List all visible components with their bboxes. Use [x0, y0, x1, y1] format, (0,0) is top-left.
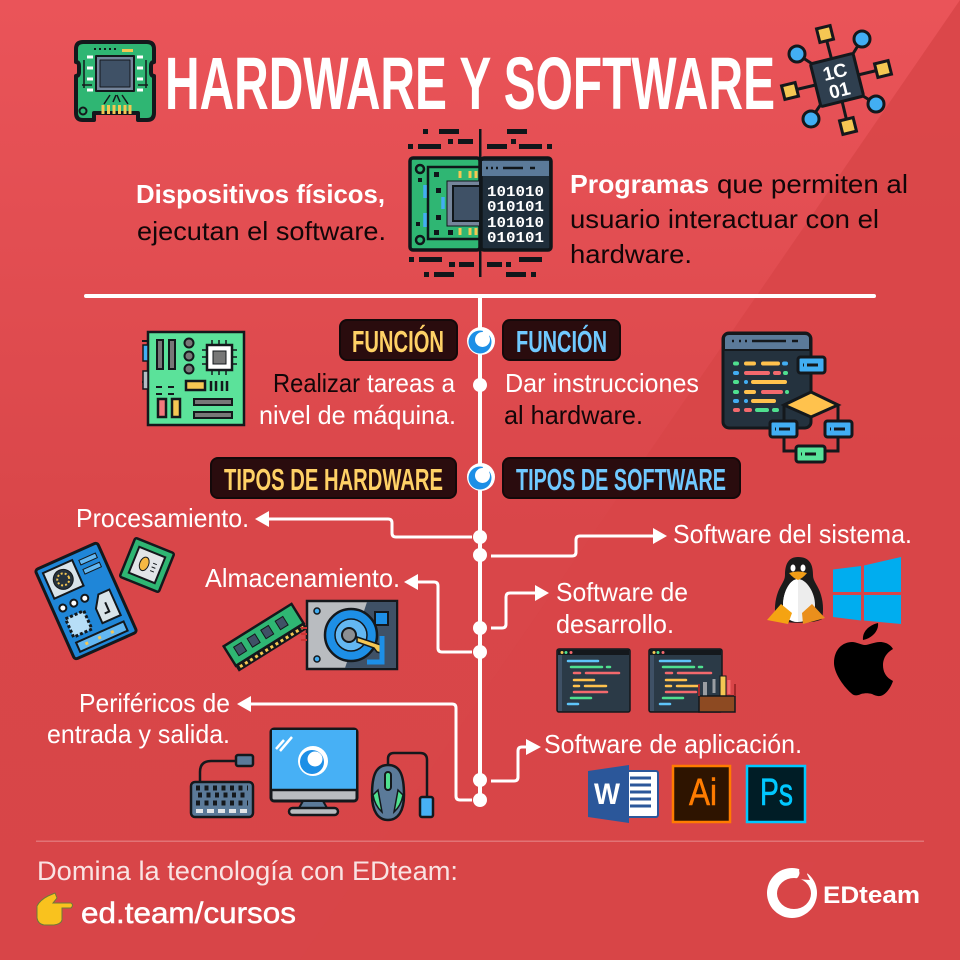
- text: función software: Dar instrucciones: [505, 368, 699, 398]
- EDteam logo: [767, 862, 920, 918]
- text: procesamiento: Procesamiento.: [76, 503, 249, 533]
- intro: hardware text: ejecutan el software.: [137, 216, 386, 246]
- connectors and arrows: [237, 511, 667, 800]
- icon: hardware chip: [76, 42, 154, 120]
- footer link: ed.team/cursos: [81, 897, 296, 930]
- text: función hardware: [259, 368, 456, 430]
- footer call to action: Domina la tecnología con EDteam:: [37, 856, 458, 886]
- EDteam logo: EDteam: [823, 882, 920, 909]
- label: función software: [503, 320, 620, 360]
- intro: software text: [570, 169, 908, 269]
- text: software de aplicación: Software de aplicación.: [544, 729, 802, 759]
- text: función software: al hardware.: [504, 400, 643, 430]
- text: función hardware: nivel de máquina.: [259, 400, 456, 430]
- icon: cpu: [120, 538, 174, 592]
- label: función hardware: [340, 320, 457, 360]
- icon: software chip network: 1C: [821, 60, 850, 86]
- intro: software text: usuario interactuar con el: [570, 204, 879, 234]
- icon: software chip network: [782, 26, 891, 134]
- text: periféricos: entrada y salida.: [47, 719, 230, 749]
- icon: ram module: [224, 604, 307, 671]
- text: función hardware: Realizar: [273, 368, 360, 398]
- icon: blue motherboard: [35, 542, 137, 660]
- text: software de desarrollo: desarrollo.: [556, 609, 674, 639]
- label: tipos de software: [503, 458, 740, 498]
- label: tipos de hardware: [211, 458, 456, 498]
- icon: hardware / software split: [408, 129, 552, 277]
- intro: hardware text: Dispositivos físicos,: [136, 179, 385, 209]
- icon: monitor: [271, 729, 357, 815]
- text: almacenamiento: Almacenamiento.: [205, 563, 400, 593]
- icon: hard disk: [301, 601, 397, 669]
- icon: code editor with toolbox: [649, 649, 735, 712]
- central timeline: [84, 294, 876, 807]
- icon: code flowchart: [723, 333, 852, 462]
- label: función hardware: FUNCIÓN: [352, 323, 444, 359]
- text: periféricos: Periféricos de: [79, 688, 230, 718]
- icon: photoshop: [747, 766, 805, 822]
- text: periféricos: [47, 688, 230, 749]
- icon: photoshop: Ps: [760, 772, 793, 814]
- icon: keyboard: [191, 755, 253, 817]
- icon: apple logo: [834, 623, 893, 696]
- icon: hardware / software split: 101010: [487, 215, 544, 232]
- icon: hardware / software split: 101010: [487, 184, 544, 201]
- icon: illustrator: Ai: [689, 772, 717, 814]
- icon: illustrator: [673, 766, 730, 822]
- text: software del sistema: Software del sistema.: [673, 519, 912, 549]
- icon: linux penguin: [767, 557, 825, 624]
- intro: hardware text: [136, 179, 386, 246]
- label: función software: FUNCIÓN: [516, 323, 607, 359]
- icon: hardware / software split: 010101: [487, 230, 544, 247]
- icon: windows logo: [833, 557, 901, 624]
- icon: software chip network: 01: [827, 78, 853, 104]
- text: función hardware: tareas a: [367, 368, 455, 398]
- label: tipos de software: TIPOS DE SOFTWARE: [516, 462, 726, 497]
- icon: word: W: [594, 778, 621, 811]
- icon: motherboard: [142, 332, 244, 425]
- text: función software: [504, 368, 699, 430]
- icon: mouse: [372, 753, 433, 820]
- intro: software text: Programas: [570, 169, 709, 199]
- icon: word: [588, 765, 658, 823]
- icon: hardware / software split: 010101: [487, 199, 544, 216]
- text: software de desarrollo: [556, 577, 688, 639]
- intro: software text: que permiten al: [717, 169, 908, 199]
- label: tipos de hardware: TIPOS DE HARDWARE: [224, 462, 443, 497]
- intro: software text: hardware.: [570, 239, 692, 269]
- footer divider: [36, 840, 924, 842]
- icon: code editor: [557, 649, 630, 712]
- text: software de desarrollo: Software de: [556, 577, 688, 607]
- icon: pointing hand: [37, 893, 72, 925]
